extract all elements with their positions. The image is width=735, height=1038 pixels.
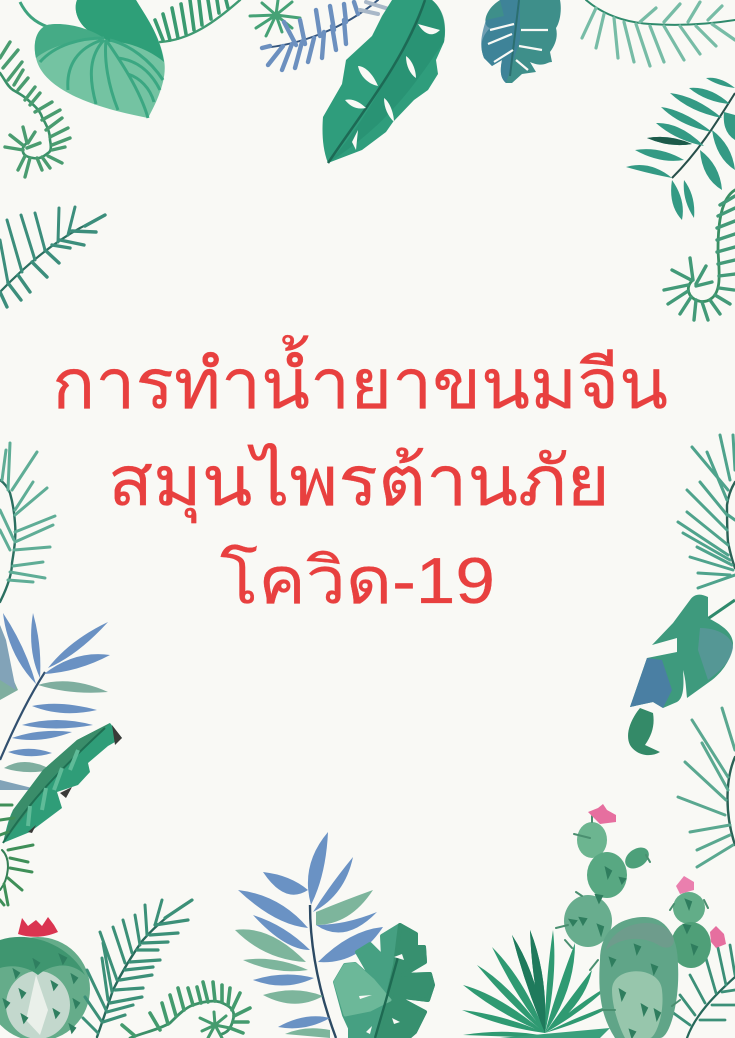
bottom palm fan [462,930,617,1038]
left frond [0,207,105,307]
right lower frond [678,708,735,867]
blue fern top [262,0,392,70]
right middle frond [678,435,735,588]
big monstera leaf top centre [323,0,445,163]
title: สมุนไพรต้านภัย [108,443,610,524]
top-left fern arch [155,0,240,42]
pink cactus flower right [710,926,726,948]
banana leaf [3,723,122,843]
title: การทำน้ำยาขนมจีน [52,335,668,423]
big blue frond left [0,613,110,790]
fern under banana leaf [0,805,33,905]
pink cactus flower middle [676,876,694,894]
top-right pale frond [582,0,735,66]
right dark fern [626,78,735,220]
bottom frond [83,900,192,1037]
pink cactus flower top [588,804,616,824]
corner frond bottom right [672,945,735,1038]
bottom monstera leaf [335,925,433,1038]
title [52,335,668,617]
right monstera leaf [628,595,735,755]
prickly pear cactus [556,816,711,1038]
bottom-left barrel cactus [0,917,90,1038]
heart leaf [20,0,165,118]
left curled fern [0,42,70,177]
bottom curled fern [122,982,250,1038]
title: โควิด-19 [220,544,495,617]
small top curl [250,0,300,36]
right curled fern [664,190,735,320]
blue-green monstera top [481,0,561,83]
left middle frond [0,443,55,602]
blue frond bottom [235,832,383,1038]
